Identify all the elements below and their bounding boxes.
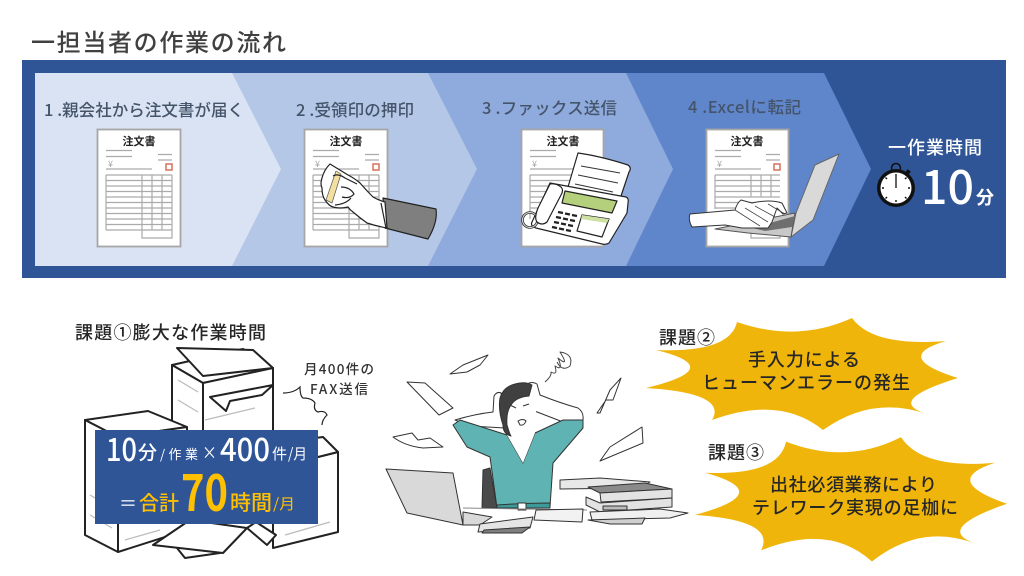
document 3	[522, 130, 604, 246]
arms	[455, 382, 583, 428]
burst: issue 3	[695, 437, 1007, 562]
icon: hand with stamp	[321, 164, 436, 239]
face	[504, 388, 540, 434]
document 1: 注文書	[122, 133, 156, 149]
document 2	[304, 130, 388, 246]
document 1: ¥	[108, 157, 113, 170]
callout: calculation box: /月	[288, 443, 307, 464]
label step 1: 1 .親会社から注文書が届く	[44, 97, 244, 121]
text: work time heading: 一作業時間	[888, 134, 982, 160]
text: monthly fax count	[304, 358, 374, 398]
desk papers	[478, 509, 583, 533]
label step 3: 3 .ファックス送信	[482, 95, 617, 119]
text: monthly fax count: FAX送信	[310, 378, 368, 398]
document 2: ¥	[315, 157, 320, 170]
callout: calculation box: ×	[202, 439, 217, 464]
callout: calculation box	[95, 425, 318, 526]
text: 10 minutes: 10	[921, 152, 974, 218]
callout: calculation box: /月	[273, 493, 295, 514]
document 2: 注文書	[330, 133, 362, 149]
chevron step 3	[428, 73, 673, 266]
chevron step 1	[35, 73, 281, 266]
heading: issue 1: 課題①膨大な作業時間	[75, 319, 266, 345]
belt	[497, 503, 550, 508]
illustration: stressed woman at desk	[386, 352, 688, 533]
title: 一担当者の作業の流れ	[31, 23, 286, 58]
callout: calculation box: 合計	[139, 487, 179, 516]
label step 2: 2 .受領印の押印	[296, 97, 414, 121]
document 4: 注文書	[730, 133, 764, 149]
callout: calculation box: /作業	[160, 444, 198, 463]
text: monthly fax count: 月400件の	[304, 358, 374, 378]
burst text	[752, 471, 958, 520]
squiggle line	[283, 387, 327, 425]
laptop	[386, 469, 492, 525]
hair	[499, 383, 532, 436]
callout: calculation box: 時間	[230, 487, 272, 517]
icon: laptop and typing hands	[689, 154, 839, 237]
flying papers	[393, 355, 643, 461]
shirt	[453, 420, 583, 508]
heading: issue 2: 課題②	[659, 324, 715, 350]
chevron step 2	[232, 73, 477, 266]
printer: right	[273, 437, 338, 548]
printer: centre	[172, 348, 273, 440]
callout: calculation box: 400	[220, 425, 270, 470]
chevron step 4	[610, 73, 871, 266]
panel: workflow	[22, 60, 1006, 278]
burst text	[702, 346, 910, 395]
label step 4: 4 .Excelに転記	[688, 94, 801, 118]
document 3: ¥	[532, 157, 537, 170]
desk line	[463, 508, 587, 510]
face details	[510, 404, 529, 425]
burst text: 手入力による	[748, 346, 860, 372]
document 1	[98, 130, 180, 246]
document 3: 注文書	[546, 133, 580, 149]
loose papers	[153, 520, 276, 558]
callout: calculation box: ＝	[119, 490, 137, 516]
printer: left	[85, 411, 187, 552]
text: 10 minutes: 分	[976, 184, 994, 210]
chair	[482, 468, 497, 508]
neck and chest	[507, 415, 535, 463]
burst text: ヒューマンエラーの発生	[702, 369, 910, 395]
callout: calculation box: 10	[106, 425, 137, 470]
callout: calculation box: 70	[181, 454, 228, 526]
burst: issue 2	[646, 318, 958, 430]
illustration: stacks of fax printers	[85, 348, 338, 558]
document 4: ¥	[717, 157, 722, 170]
spiral	[545, 352, 571, 382]
document 4	[706, 130, 788, 246]
icon: stopwatch	[877, 164, 915, 207]
icon: fax machine	[522, 153, 630, 244]
heading: issue 3: 課題③	[708, 439, 764, 465]
burst text: 出社必須業務により	[770, 471, 937, 497]
callout: calculation box: 分	[138, 438, 157, 465]
burst text: テレワーク実現の足枷に	[752, 494, 958, 520]
stacked binders and paper	[560, 478, 688, 524]
callout: calculation box: 件	[272, 443, 287, 464]
